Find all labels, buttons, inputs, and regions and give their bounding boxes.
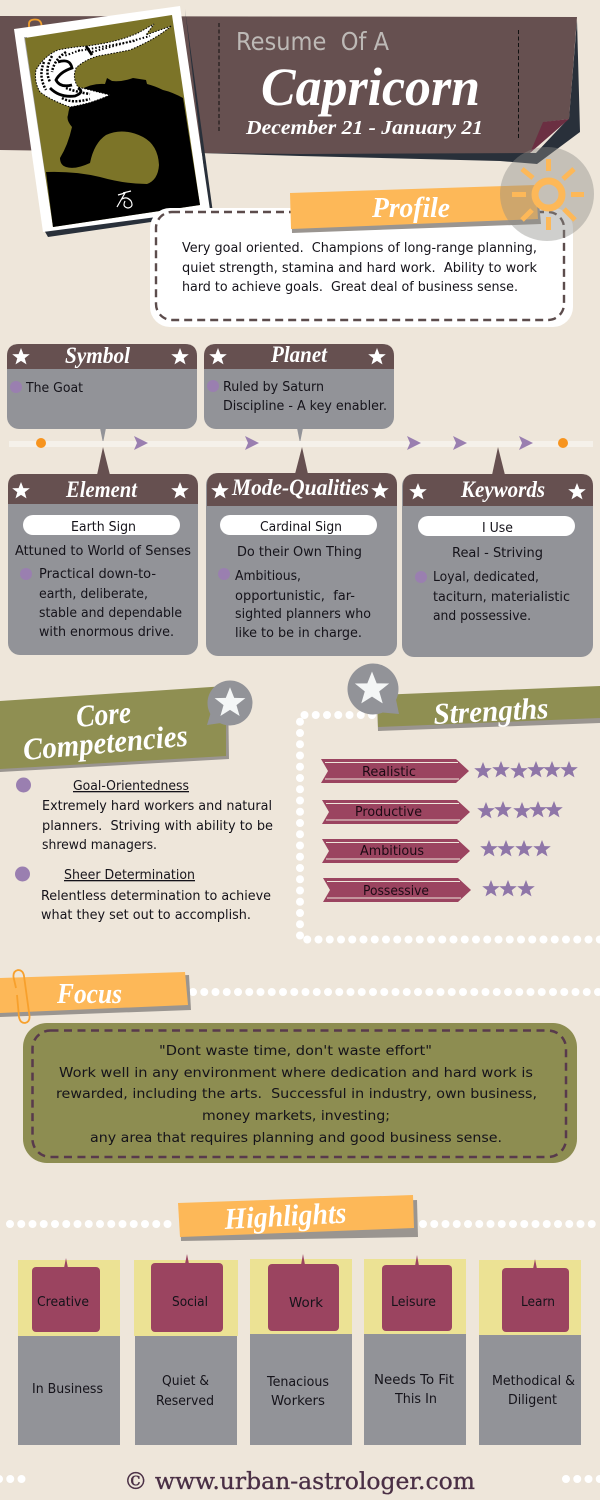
card: creative: In Business	[32, 1382, 103, 1397]
core competencies list: shrewd managers.	[42, 838, 157, 853]
panel: mode-qualities: sighted planners who	[235, 607, 371, 622]
panel: keywords: and possessive.	[433, 609, 531, 624]
card: leisure: Needs To Fit	[374, 1373, 454, 1388]
paperclip	[13, 970, 30, 1023]
ribbon: possessive: Possessive	[363, 884, 429, 899]
core competencies list: what they set out to accomplish.	[41, 908, 251, 923]
panel: planet: Ruled by Saturn	[223, 380, 324, 395]
heading: highlights: Highlights	[223, 1197, 347, 1236]
strengths ribbons	[321, 759, 471, 902]
card: work	[250, 1254, 352, 1445]
header main title: Capricorn	[261, 57, 480, 117]
profile text	[182, 241, 537, 295]
panel: planet: Planet	[270, 342, 328, 367]
capricorn picture card	[14, 6, 213, 237]
core competencies list: Extremely hard workers and natural	[42, 799, 272, 814]
card: work: Workers	[271, 1394, 325, 1409]
card: learn: Learn	[521, 1295, 555, 1310]
panel: symbol: The Goat	[25, 381, 83, 396]
heading: strengths	[348, 664, 600, 731]
panel: element: Practical down-to-	[39, 567, 156, 582]
panel: keywords: I Use	[482, 521, 513, 536]
heading: profile: Profile	[371, 192, 450, 224]
card: social: Reserved	[156, 1394, 214, 1409]
panel: symbol	[7, 343, 197, 443]
panel: mode-qualities: opportunistic, far-	[235, 589, 355, 604]
goat silhouette	[46, 78, 200, 227]
panel: keywords	[402, 447, 593, 657]
core competencies list: Goal-Orientedness	[73, 779, 189, 794]
focus text: any area that requires planning and good business sense.	[90, 1131, 502, 1146]
panel: element: Earth Sign	[71, 520, 136, 535]
ribbon: realistic	[321, 759, 469, 783]
core competencies list: Sheer Determination	[64, 868, 195, 883]
core competencies list: planners. Striving with ability to be	[42, 819, 273, 834]
ribbon: productive	[322, 800, 470, 824]
panel: element: with enormous drive.	[39, 625, 174, 640]
heading: strengths: Strengths	[433, 692, 549, 731]
card: work: Tenacious	[266, 1375, 329, 1390]
heading: focus: Focus	[56, 978, 122, 1010]
profile text: hard to achieve goals. Great deal of business sense.	[182, 280, 518, 295]
panel: mode-qualities	[206, 447, 397, 656]
capricorn symbol	[117, 191, 132, 208]
panel: element: Attuned to World of Senses	[15, 544, 191, 559]
card: social: Quiet &	[162, 1374, 209, 1389]
panel: profile	[150, 208, 573, 327]
ribbon: ambitious: Ambitious	[360, 844, 424, 859]
panel: element	[8, 447, 198, 655]
card: leisure	[364, 1255, 466, 1445]
panel: mode-qualities: Mode-Qualities	[231, 475, 369, 500]
card: social: Social	[172, 1295, 208, 1310]
card: learn: Methodical &	[492, 1374, 575, 1389]
ribbon: ambitious	[322, 839, 470, 863]
ribbon: realistic: Realistic	[362, 765, 416, 780]
icon: star bubble	[207, 680, 252, 726]
panel: keywords: Keywords	[460, 477, 545, 502]
heading: focus	[0, 970, 191, 1023]
core competencies list	[15, 778, 273, 923]
panel: keywords: Loyal, dedicated,	[433, 570, 539, 585]
card: learn: Diligent	[508, 1393, 557, 1408]
icon: sun	[500, 147, 594, 241]
ribbon: productive: Productive	[355, 805, 422, 820]
paperclip: header	[29, 20, 42, 35]
focus text	[56, 1044, 537, 1146]
profile text: Very goal oriented. Champions of long-range planning,	[182, 241, 537, 256]
card: social	[134, 1254, 238, 1445]
profile text: quiet strength, stamina and hard work. Ability to work	[182, 261, 537, 276]
core competencies list: Relentless determination to achieve	[41, 889, 271, 904]
heading: core competencies	[0, 680, 252, 772]
rating stars	[474, 761, 578, 896]
ribbon: possessive	[323, 878, 471, 902]
card: learn	[479, 1259, 581, 1445]
header dates: December 21 - January 21	[245, 117, 483, 139]
focus text: rewarded, including the arts. Successful in industry, own business,	[56, 1087, 537, 1102]
panel: planet: Discipline - A key enabler.	[223, 399, 387, 414]
panel: keywords: taciturn, materialistic	[433, 590, 570, 605]
panel: element: Element	[65, 477, 138, 502]
card: leisure: Leisure	[391, 1295, 436, 1310]
focus dotted line	[193, 988, 600, 996]
panel: focus	[23, 1023, 577, 1163]
timeline	[9, 436, 593, 450]
header banner	[0, 16, 580, 164]
panel: symbol: Symbol	[65, 343, 131, 368]
icon: star bubble	[348, 664, 399, 714]
focus text: "Dont waste time, don't waste effort"	[159, 1044, 432, 1059]
panel: element: stable and dependable	[39, 606, 182, 621]
heading: core competencies: Competencies	[22, 718, 189, 767]
card: work: Work	[289, 1296, 323, 1311]
panel: element: earth, deliberate,	[39, 587, 148, 602]
panel: planet	[204, 342, 394, 443]
panel: mode-qualities: Do their Own Thing	[237, 545, 362, 560]
heading: highlights	[178, 1195, 418, 1241]
footer dots	[0, 1475, 600, 1483]
heading: profile	[290, 185, 541, 233]
header small title: Resume Of A	[236, 27, 389, 56]
panel: mode-qualities: Cardinal Sign	[260, 520, 342, 535]
panel: mode-qualities: Ambitious,	[235, 569, 301, 584]
strengths dotted frame	[300, 715, 600, 940]
card: creative	[18, 1258, 120, 1445]
goat horns	[36, 24, 171, 107]
panel: mode-qualities: like to be in charge.	[235, 626, 362, 641]
card: leisure: This In	[394, 1392, 437, 1407]
heading: core competencies: Core	[75, 694, 133, 734]
highlights dotted lines	[10, 1220, 600, 1228]
panel: keywords: Real - Striving	[452, 546, 543, 561]
focus text: Work well in any environment where dedication and hard work is	[59, 1066, 533, 1081]
footer url: © www.urban-astrologer.com	[124, 1469, 475, 1495]
card: creative: Creative	[37, 1295, 89, 1310]
focus text: money markets, investing;	[202, 1109, 390, 1124]
